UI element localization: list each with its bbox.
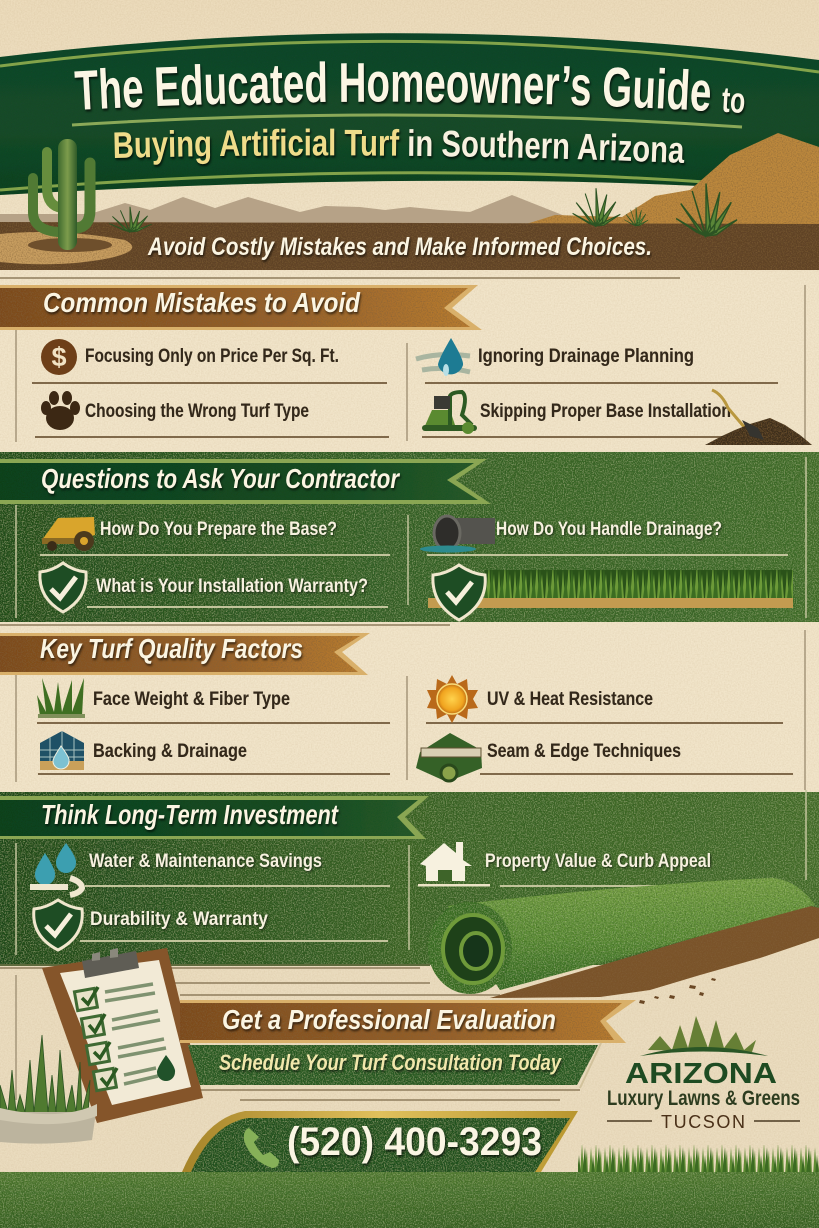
heading: Think Long-Term Investment — [41, 799, 339, 830]
logo mark — [640, 1016, 768, 1056]
heading: Common Mistakes to Avoid — [43, 287, 361, 318]
sand patch — [0, 232, 132, 264]
banner: investment — [0, 796, 429, 839]
panel: header — [0, 0, 819, 270]
icon: dollar — [41, 339, 77, 375]
item: Focusing Only on Price Per Sq. Ft. — [85, 346, 339, 367]
banner: get evaluation — [180, 1000, 636, 1043]
icon: grass tuft — [37, 678, 85, 718]
panel: bottom call to action — [0, 878, 819, 1175]
icon: drainage pipe — [420, 516, 495, 552]
icon: shovel and dirt pile — [705, 390, 812, 445]
icon: compactor — [422, 392, 477, 434]
desert mountains — [0, 195, 570, 226]
short grass strip — [578, 1145, 819, 1175]
banner: common mistakes — [0, 285, 482, 330]
item: Face Weight & Fiber Type — [93, 689, 290, 710]
icon: house — [418, 842, 490, 886]
item: Skipping Proper Base Installation — [480, 401, 731, 422]
logo — [607, 1016, 800, 1132]
item: How Do You Handle Drainage? — [496, 519, 722, 540]
panel: long-term investment — [0, 790, 819, 965]
item: How Do You Prepare the Base? — [100, 519, 337, 540]
icon: shield check — [34, 900, 82, 950]
icon: clipboard checklist — [42, 948, 203, 1123]
icon: dollar: $ — [51, 342, 67, 372]
checklist rows — [74, 984, 166, 1091]
panel: quality factors — [0, 622, 819, 792]
icon: shield check — [433, 565, 485, 620]
icon: water drop — [416, 338, 470, 376]
item: What is Your Installation Warranty? — [96, 576, 368, 597]
banner: quality factors — [0, 633, 370, 675]
heading: Key Turf Quality Factors — [40, 633, 303, 664]
logo name: ARIZONA — [625, 1058, 777, 1090]
icon: shield check — [40, 563, 86, 612]
item: Ignoring Drainage Planning — [478, 346, 694, 367]
item: Choosing the Wrong Turf Type — [85, 401, 309, 422]
icon: paw — [41, 391, 80, 430]
icon: excavator — [42, 517, 95, 551]
item: Water & Maintenance Savings — [89, 851, 322, 872]
banner: questions — [0, 459, 491, 504]
banner: schedule consultation — [188, 1043, 601, 1088]
panel: contractor questions — [0, 452, 819, 622]
soil beneath roll — [490, 905, 819, 1004]
icon: drops and wrench — [30, 843, 82, 895]
turf roll — [428, 878, 815, 994]
icon: potted grass — [0, 1035, 97, 1144]
icon: sun — [427, 675, 478, 723]
subtitle line: Buying Artificial Turf in Southern Arizona — [114, 128, 686, 168]
phone number: (520) 400-3293 — [287, 1120, 542, 1164]
item: Durability & Warranty — [90, 909, 268, 930]
icon: agave plants — [109, 184, 737, 236]
item: Backing & Drainage — [93, 741, 247, 762]
title ribbon — [0, 33, 819, 195]
sand hill — [520, 133, 819, 226]
icon: phone — [244, 1128, 279, 1168]
heading: Questions to Ask Your Contractor — [41, 463, 401, 494]
cta heading: Get a Professional Evaluation — [222, 1004, 556, 1035]
banner: phone — [182, 1111, 578, 1172]
item: UV & Heat Resistance — [487, 689, 653, 710]
panel: common mistakes — [0, 272, 819, 452]
icon: backing and drainage — [40, 731, 84, 770]
tagline: Avoid Costly Mistakes and Make Informed Choices. — [147, 233, 652, 261]
icon: saguaro cactus — [33, 139, 90, 250]
item: Property Value & Curb Appeal — [485, 851, 711, 872]
title: The Educated Homeowner’s Guide to — [74, 61, 746, 116]
grass strip on board — [428, 570, 793, 608]
desert ground — [0, 222, 819, 270]
bottom lawn — [0, 1172, 819, 1228]
icon: turf seam — [416, 733, 482, 782]
item: Seam & Edge Techniques — [487, 741, 681, 762]
logo city: TUCSON — [661, 1112, 745, 1132]
cta subheading: Schedule Your Turf Consultation Today — [219, 1050, 562, 1075]
